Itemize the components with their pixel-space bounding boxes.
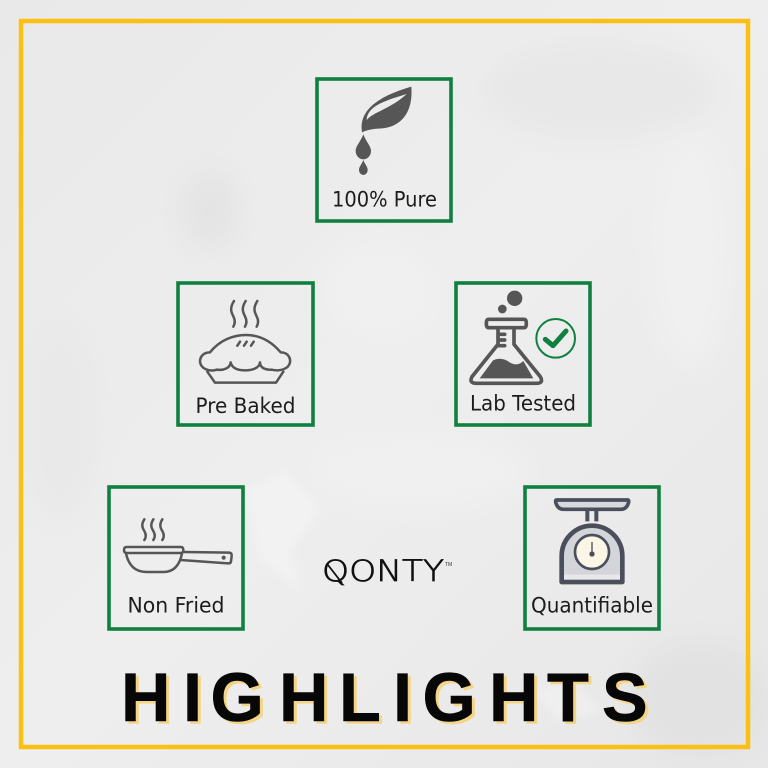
icon: kitchen scale <box>556 500 629 582</box>
icon: leaf with drops <box>356 87 412 175</box>
heading: HIGHLIGHTS: HIGHLIGHTS <box>121 659 648 736</box>
icon: flask <box>471 291 542 383</box>
label: Non Fried <box>128 594 224 618</box>
icon: green check badge <box>536 319 575 358</box>
icon: pie with steam <box>200 301 290 383</box>
panel: Quantifiable <box>525 487 659 629</box>
logo: QONTY: QONTY <box>322 554 444 588</box>
label: Lab Tested <box>470 392 576 416</box>
label: Quantifiable <box>531 594 653 618</box>
icon: frying pan with steam <box>124 519 232 572</box>
panel: Pre Baked <box>178 283 313 425</box>
label: 100% Pure <box>332 188 437 212</box>
label: Pre Baked <box>196 394 296 418</box>
panel: Lab Tested <box>456 283 590 425</box>
logo: QONTY: TM <box>445 562 452 568</box>
panel: Non Fried <box>109 487 243 629</box>
heading: HIGHLIGHTS: HIGHLIGHTS <box>124 662 651 738</box>
panel: 100% Pure <box>317 79 451 221</box>
